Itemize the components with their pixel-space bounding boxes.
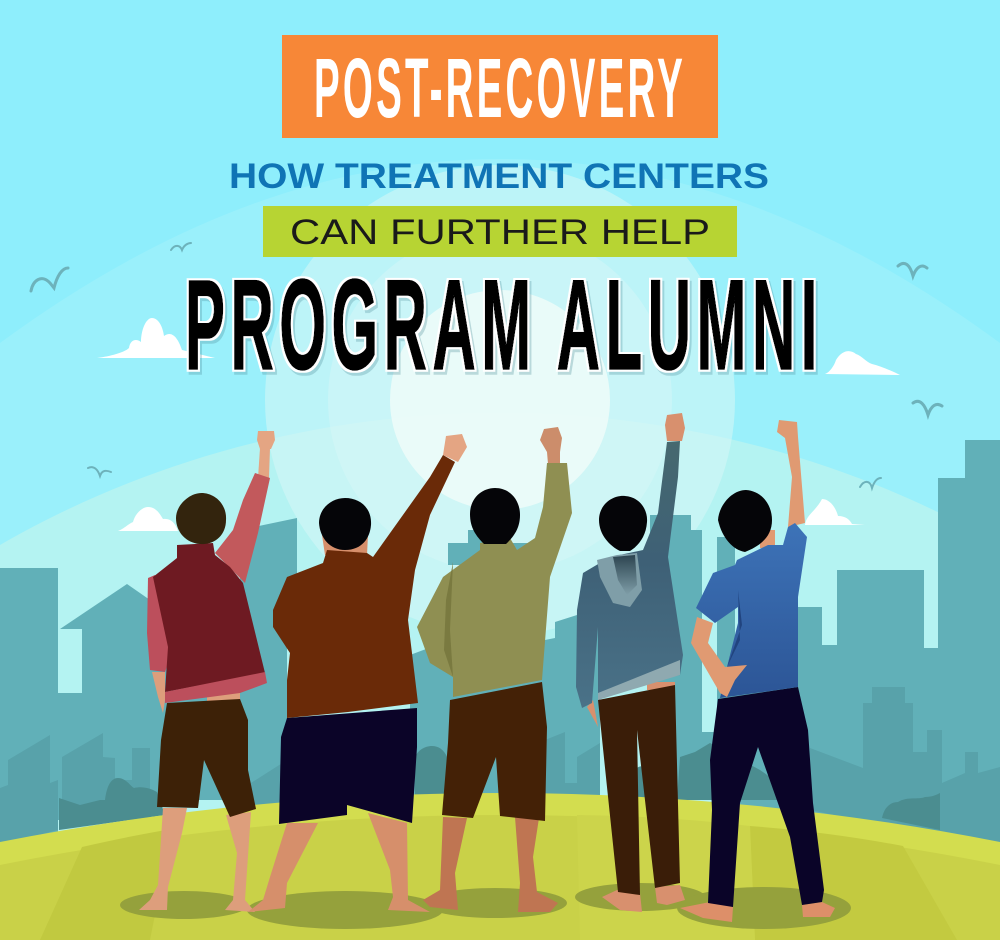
clouds — [97, 318, 900, 531]
subtitle banner: can further help — [263, 206, 737, 257]
grassy hill — [0, 793, 1000, 940]
person 2: brown sweater — [248, 434, 467, 912]
title banner: POST-RECOVERY — [282, 35, 718, 138]
bushes — [59, 743, 940, 830]
person 3: olive shirt — [417, 427, 572, 912]
person 1: maroon vest — [139, 431, 275, 912]
person 4: grey hoodie — [576, 413, 685, 912]
subtitle banner: can further help: CAN FURTHER HELP — [290, 213, 710, 252]
ground shadows — [120, 883, 851, 929]
subtitle: how treatment centers: HOW TREATMENT CENTERS — [229, 157, 769, 196]
person 5: blue t-shirt — [680, 420, 835, 922]
birds — [31, 243, 942, 488]
city skyline — [0, 440, 1000, 850]
foreground skyline — [0, 687, 1000, 850]
